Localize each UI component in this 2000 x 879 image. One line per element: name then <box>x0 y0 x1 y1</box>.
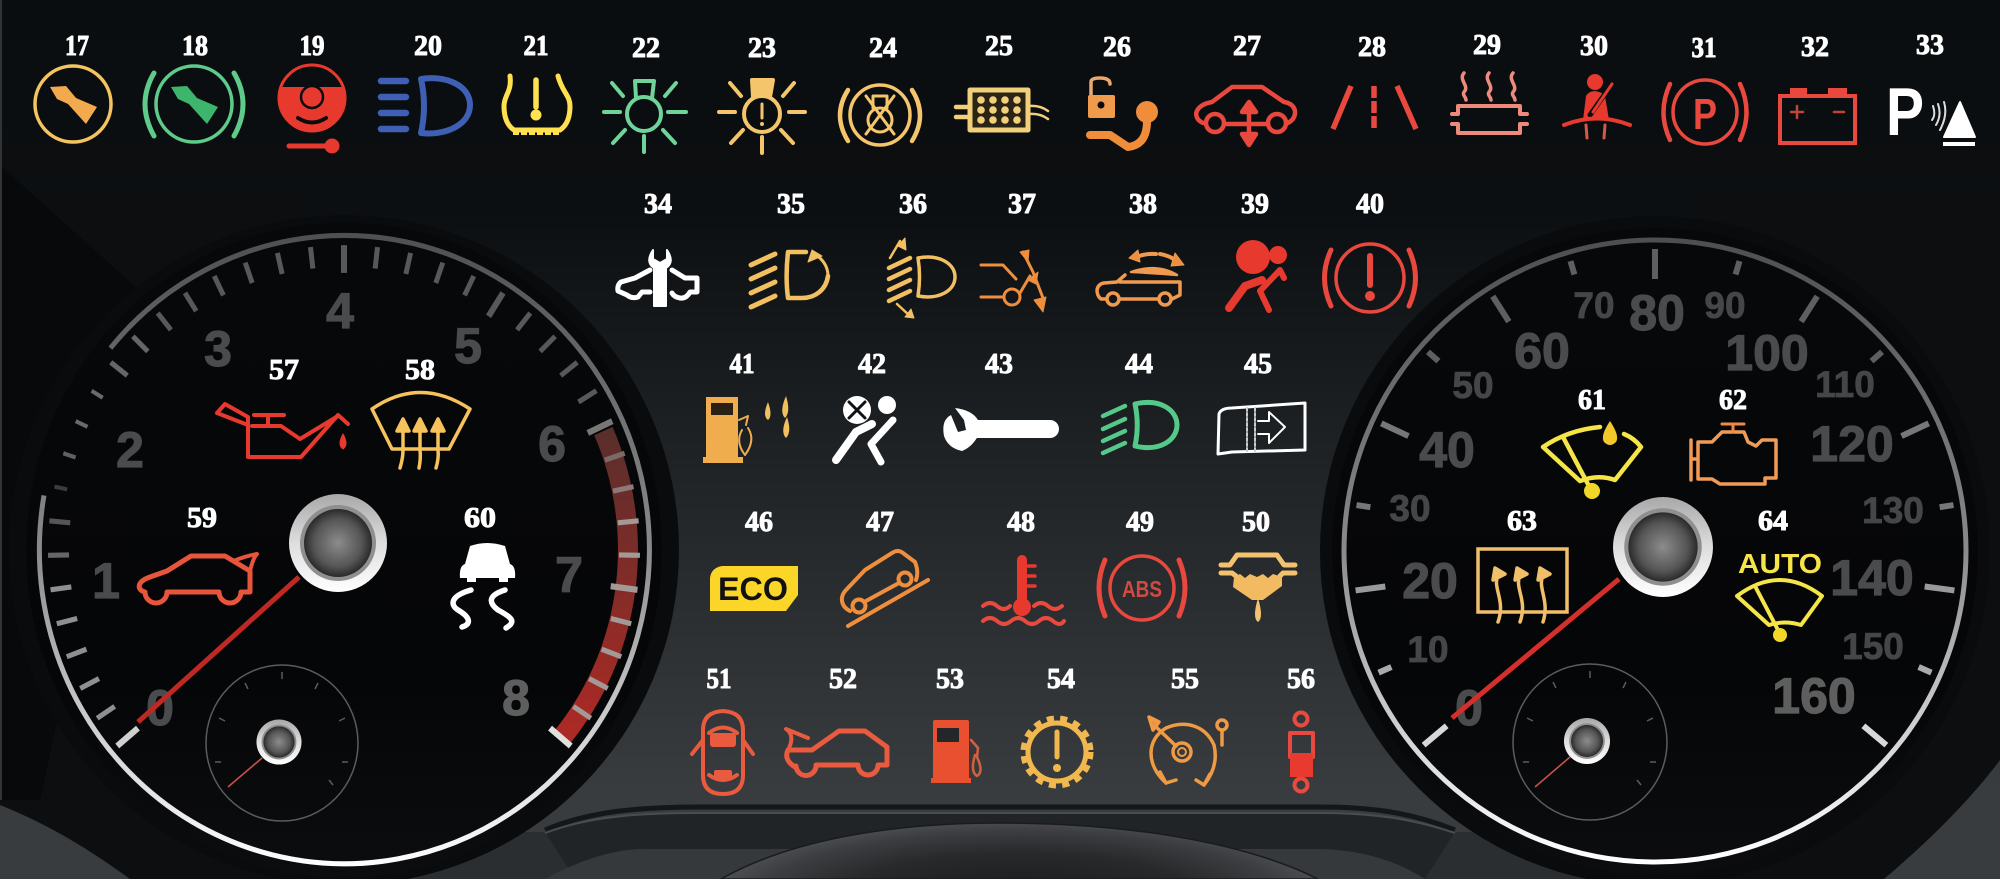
speedometer numerals <box>1389 285 1924 736</box>
icon 54: 54 <box>1047 663 1075 695</box>
icon 25: 25 <box>985 30 1013 62</box>
tachometer numerals: 5 <box>454 318 482 374</box>
icon 41 <box>703 348 789 463</box>
right bezel <box>1320 190 2000 879</box>
icon 64 <box>1737 505 1822 642</box>
icon 21 <box>504 30 570 132</box>
icon 39 <box>1229 188 1287 310</box>
icon 38 <box>1097 188 1184 305</box>
speedometer numerals: 80 <box>1629 285 1685 341</box>
icon 54 <box>1024 663 1090 785</box>
instrument shelf <box>400 807 1600 879</box>
speedometer numerals: 30 <box>1389 488 1431 529</box>
speedometer dial <box>1332 228 1978 874</box>
tachometer numerals: 6 <box>538 416 566 472</box>
speedometer numerals: 90 <box>1704 285 1746 326</box>
tachometer numerals: 1 <box>92 553 120 609</box>
icon 40: 40 <box>1356 188 1384 220</box>
speedometer numerals: 130 <box>1862 490 1924 531</box>
icon 18: 18 <box>182 30 208 62</box>
icon 30: 30 <box>1580 30 1608 62</box>
icon 52 <box>786 663 887 776</box>
icon 58: 58 <box>405 354 435 386</box>
icon 49 <box>1099 506 1185 620</box>
icon 43: 43 <box>985 348 1013 380</box>
icon 24 <box>840 32 920 145</box>
icon 62: 62 <box>1719 384 1747 416</box>
speedometer numerals: 140 <box>1830 550 1914 606</box>
icon 44: 44 <box>1125 348 1153 380</box>
icon 26: 26 <box>1103 31 1131 63</box>
icon 59 <box>139 502 257 603</box>
speedometer numerals: 100 <box>1725 325 1809 381</box>
icon 31: P <box>1693 90 1717 139</box>
speedometer hub <box>1613 497 1713 597</box>
icon 32 <box>1780 31 1855 143</box>
speedometer numerals: 10 <box>1407 629 1449 670</box>
icon 50: 50 <box>1242 506 1270 538</box>
tachometer numerals <box>92 283 583 736</box>
tachometer numerals: 3 <box>204 321 232 377</box>
icon 58 <box>372 354 470 468</box>
icon 62 <box>1691 384 1776 484</box>
icon 21: 21 <box>524 30 548 62</box>
icon 23 <box>719 32 805 153</box>
icon 37 <box>981 188 1046 312</box>
icon 45: 45 <box>1244 348 1272 380</box>
tachometer hub <box>289 494 387 592</box>
tachometer gauge <box>26 222 662 878</box>
icon 52: 52 <box>829 663 857 695</box>
icon 33: P <box>1886 74 1924 150</box>
icon 31 <box>1664 32 1746 144</box>
icon 46: 46 <box>745 506 773 538</box>
icon 59: 59 <box>187 502 217 534</box>
tachometer needle <box>138 577 299 722</box>
icon 24: 24 <box>869 32 897 64</box>
icon 34: 34 <box>644 188 672 220</box>
icon 53: 53 <box>936 663 964 695</box>
icon 23: 23 <box>748 32 776 64</box>
icon 64: 64 <box>1758 505 1788 537</box>
speedometer numerals: 150 <box>1842 626 1904 667</box>
icon 55: 55 <box>1171 663 1199 695</box>
icon 19 <box>278 30 346 154</box>
tachometer numerals: 2 <box>116 422 144 478</box>
icon 25 <box>956 30 1048 130</box>
icon 32: 32 <box>1801 31 1829 63</box>
icon 36 <box>889 188 955 318</box>
icon 19: 19 <box>300 30 324 62</box>
icon 42: 42 <box>858 348 886 380</box>
icon 26 <box>1088 31 1158 147</box>
icon 63 <box>1478 505 1567 622</box>
icon 35 <box>751 188 828 307</box>
icon 60 <box>453 502 515 628</box>
icon 50 <box>1221 506 1295 622</box>
icon 17 <box>35 30 111 142</box>
speedometer small dial <box>1513 664 1667 820</box>
icon 36: 36 <box>899 188 927 220</box>
icon 44 <box>1103 348 1177 453</box>
icon 60: 60 <box>464 502 496 534</box>
icon 48: 48 <box>1007 506 1035 538</box>
icon 49: ABS <box>1122 576 1162 602</box>
icon 37: 37 <box>1008 188 1036 220</box>
icon 39: 39 <box>1241 188 1269 220</box>
tachometer numerals: 0 <box>146 680 174 736</box>
icon 17: 17 <box>65 30 89 62</box>
icon 38: 38 <box>1129 188 1157 220</box>
icon 22: 22 <box>632 32 660 64</box>
steering column dome <box>721 823 1318 879</box>
icon 28: 28 <box>1358 31 1386 63</box>
speedometer numerals: 160 <box>1772 668 1856 724</box>
icon 46: ECO <box>718 571 788 607</box>
icon 22 <box>604 32 686 152</box>
icon 57: 57 <box>269 354 299 386</box>
icon 47: 47 <box>866 506 894 538</box>
speedometer numerals: 0 <box>1455 680 1483 736</box>
left bezel <box>0 0 679 879</box>
icon 41: 41 <box>730 348 754 380</box>
icon 55 <box>1149 663 1227 785</box>
speedometer numerals: 120 <box>1810 416 1894 472</box>
icon 48 <box>983 506 1064 624</box>
icon 33: 33 <box>1916 29 1944 61</box>
tachometer dial <box>26 222 662 878</box>
icon 18 <box>145 30 243 142</box>
icon 57 <box>217 354 348 457</box>
icon 20: 20 <box>414 30 442 62</box>
icon 35: 35 <box>777 188 805 220</box>
icon 56: 56 <box>1287 663 1315 695</box>
icon 33 <box>1886 29 1975 150</box>
speedometer numerals: 60 <box>1514 323 1570 379</box>
icon 49: 49 <box>1126 506 1154 538</box>
icon 63: 63 <box>1507 505 1537 537</box>
speedometer numerals: 50 <box>1452 365 1494 406</box>
icon 46 <box>710 506 798 611</box>
tachometer numerals: 7 <box>555 547 583 603</box>
icon 34 <box>618 188 697 306</box>
icon 61 <box>1543 384 1641 499</box>
speedometer needle <box>1452 579 1619 718</box>
speedometer numerals: 70 <box>1573 285 1615 326</box>
speedometer numerals: 20 <box>1402 553 1458 609</box>
tachometer small dial <box>206 665 358 821</box>
icon 30 <box>1564 30 1630 138</box>
icon 29 <box>1452 29 1527 133</box>
tachometer numerals: 8 <box>502 670 530 726</box>
icon 56 <box>1287 663 1315 792</box>
icon 53 <box>931 663 980 783</box>
speedometer gauge <box>1332 228 1978 874</box>
speedometer numerals: 110 <box>1815 364 1875 405</box>
speedometer numerals: 40 <box>1419 422 1475 478</box>
icon 43 <box>943 348 1050 451</box>
icon 64: AUTO <box>1738 548 1822 579</box>
icon 28 <box>1333 31 1416 129</box>
icon 29: 29 <box>1473 29 1501 61</box>
icon 51: 51 <box>706 663 732 695</box>
icon 40 <box>1324 188 1416 312</box>
icon 42 <box>836 348 896 462</box>
icon 51 <box>692 663 753 794</box>
icon 20 <box>381 30 470 133</box>
icon 27 <box>1196 30 1295 145</box>
icon 31: 31 <box>1692 32 1716 64</box>
tachometer numerals: 4 <box>326 283 354 339</box>
icon 47 <box>842 506 928 626</box>
icon 27: 27 <box>1233 30 1261 62</box>
icon 45 <box>1218 348 1305 454</box>
icon 61: 61 <box>1578 384 1606 416</box>
